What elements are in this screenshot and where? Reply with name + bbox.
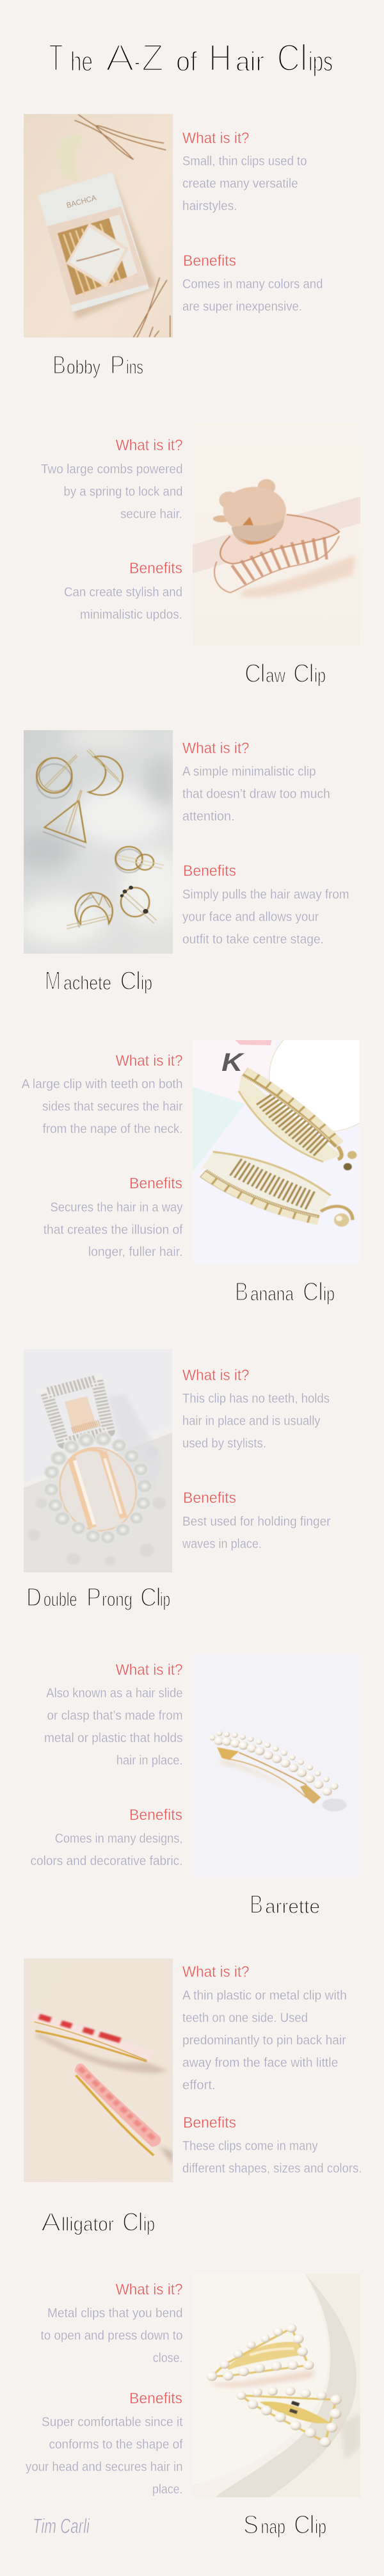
photo: claw clip: [193, 478, 360, 646]
what is it heading: What is it?: [182, 1367, 250, 1384]
what is it text: A thin plastic or metal clip with: [182, 1989, 347, 2003]
label: banana clip: anana: [250, 1283, 294, 1305]
photo: pearl barrette: [209, 1731, 347, 1811]
benefits text: [182, 1515, 331, 1551]
label: claw clip: l: [260, 658, 266, 688]
benefits text: Comes in many designs,: [55, 1832, 183, 1846]
label: bobby pins: B: [52, 350, 66, 380]
label: claw clip: aw: [266, 664, 285, 687]
benefits text: colors and decorative fabric.: [31, 1854, 183, 1868]
panel: snap clip: [26, 2274, 360, 2539]
what is it text: effort.: [182, 2078, 216, 2092]
title: he: [70, 47, 93, 77]
what is it heading: What is it?: [116, 437, 183, 454]
label: machete clip: achete: [63, 972, 111, 994]
photo: pearl snap clips: [206, 2274, 360, 2497]
benefits heading: Benefits: [183, 1490, 236, 1507]
what is it text: predominantly to pin back hair: [182, 2034, 346, 2048]
benefits text: [182, 277, 323, 314]
benefits heading: Benefits: [129, 1807, 182, 1824]
what is it text: A simple minimalistic clip: [182, 765, 316, 779]
benefits text: Simply pulls the hair away from: [182, 888, 349, 902]
label: machete clip: l: [136, 966, 141, 995]
label: double prong clip: C: [140, 1583, 157, 1612]
title: of: [176, 47, 198, 77]
benefits text: [64, 585, 182, 622]
benefits text: Comes in many colors and: [182, 277, 323, 291]
photo: alligator clips: [24, 1959, 173, 2182]
label: snap clip: C: [294, 2510, 310, 2539]
benefits text: These clips come in many: [182, 2139, 318, 2153]
what is it text: [182, 1989, 347, 2092]
label: double prong clip: P: [86, 1583, 101, 1612]
benefits text: [31, 1832, 183, 1868]
label: claw clip: C: [293, 658, 310, 688]
panel: claw clip: [41, 423, 360, 688]
label: claw clip: C: [244, 658, 261, 688]
benefits text: place.: [152, 2482, 183, 2497]
what is it text: Two large combs powered: [41, 462, 183, 477]
panel: machete clip: [15, 724, 349, 995]
what is it text: Small, thin clips used to: [182, 154, 307, 168]
what is it text: teeth on one side. Used: [182, 2011, 308, 2025]
title: l: [300, 37, 308, 79]
label: bobby pins: ins: [126, 356, 143, 379]
benefits text: Best used for holding finger: [182, 1515, 331, 1529]
title: Z: [141, 37, 164, 79]
panel: banana clip: [22, 1021, 384, 1307]
label: banana clip: ip: [323, 1283, 335, 1305]
label: alligator clip: A: [41, 2207, 61, 2237]
what is it text: attention.: [182, 810, 234, 824]
benefits text: that creates the illusion of: [44, 1223, 183, 1237]
what is it text: [41, 2306, 183, 2365]
title: T: [49, 37, 63, 79]
what is it text: A large clip with teeth on both: [22, 1077, 183, 1091]
label: claw clip: ip: [314, 664, 326, 687]
label: alligator clip: lligator: [61, 2213, 114, 2235]
benefits heading: Benefits: [183, 863, 236, 880]
what is it heading: What is it?: [116, 1052, 183, 1070]
title: air: [236, 47, 264, 77]
what is it text: create many versatile: [182, 177, 298, 191]
photo: banana clips: K: [221, 1048, 244, 1077]
what is it heading: What is it?: [116, 2281, 183, 2299]
what is it text: or clasp that’s made from: [47, 1709, 183, 1723]
what is it text: used by stylists.: [182, 1437, 266, 1451]
label: alligator clip: ip: [143, 2213, 155, 2235]
title: -: [134, 47, 140, 77]
label: double prong clip: rong: [102, 1588, 132, 1611]
what is it text: [182, 765, 330, 824]
what is it text: to open and press down to: [41, 2329, 183, 2343]
what is it heading: What is it?: [182, 1964, 250, 1981]
label: alligator clip: C: [122, 2207, 139, 2237]
benefits text: [182, 2139, 362, 2176]
label: alligator clip: l: [138, 2207, 143, 2237]
what is it heading: What is it?: [116, 1661, 183, 1679]
benefits text: [44, 1201, 183, 1259]
label: double prong clip: ouble: [44, 1588, 77, 1611]
label: snap clip: ip: [315, 2516, 326, 2538]
label: bobby pins: obby: [67, 356, 100, 379]
panel: bobby pins: [24, 114, 323, 380]
what is it heading: What is it?: [182, 740, 250, 757]
what is it text: that doesn’t draw too much: [182, 787, 330, 801]
label: banana clip: l: [317, 1277, 324, 1307]
photo: bobby pins in box: BACHCA: [65, 193, 97, 210]
label: machete clip: ip: [141, 972, 152, 994]
benefits text: [182, 888, 349, 947]
benefits text: outfit to take centre stage.: [182, 933, 324, 947]
benefits heading: Benefits: [129, 1175, 182, 1193]
benefits heading: Benefits: [129, 560, 182, 577]
benefits heading: Benefits: [183, 252, 236, 270]
panel: barrette: [31, 1654, 360, 1919]
what is it text: [41, 462, 183, 521]
what is it text: hair in place.: [116, 1754, 183, 1768]
title: H: [209, 37, 232, 79]
benefits text: are super inexpensive.: [182, 300, 302, 314]
what is it text: [182, 154, 307, 213]
what is it text: hair in place and is usually: [182, 1414, 320, 1428]
what is it text: metal or plastic that holds: [44, 1731, 183, 1745]
what is it text: close.: [153, 2351, 183, 2365]
photo: double prong clip: [24, 1349, 172, 1572]
label: machete clip: M: [45, 966, 61, 995]
benefits heading: Benefits: [129, 2390, 182, 2408]
label: bobby pins: P: [110, 350, 125, 380]
panel: double prong clip: [24, 1349, 331, 1612]
label: machete clip: C: [120, 966, 137, 995]
what is it text: sides that secures the hair: [42, 1100, 183, 1114]
benefits text: minimalistic updos.: [80, 608, 182, 622]
benefits text: your face and allows your: [182, 910, 319, 924]
signature: Tim Carli: [33, 2515, 90, 2538]
what is it text: [182, 1392, 330, 1451]
photo: banana clips: [193, 1040, 360, 1264]
label: barrette: B: [250, 1889, 263, 1919]
label: double prong clip: ip: [160, 1588, 170, 1611]
title: A: [105, 37, 135, 79]
what is it text: secure hair.: [120, 507, 182, 521]
benefits text: your head and secures hair in: [26, 2460, 183, 2474]
what is it text: [44, 1686, 183, 1768]
label: double prong clip: D: [26, 1583, 42, 1612]
photo: bobby pins in box: [24, 114, 173, 338]
label: banana clip: C: [303, 1277, 319, 1307]
title: ips: [308, 47, 333, 77]
benefits text: Super comfortable since it: [42, 2415, 183, 2429]
benefits text: different shapes, sizes and colors.: [182, 2162, 362, 2176]
what is it text: Metal clips that you bend: [47, 2306, 183, 2320]
what is it text: away from the face with little: [182, 2056, 338, 2070]
benefits text: longer, fuller hair.: [88, 1245, 183, 1259]
what is it text: This clip has no teeth, holds: [182, 1392, 330, 1406]
benefits heading: Benefits: [183, 2114, 236, 2132]
what is it text: hairstyles.: [182, 199, 237, 213]
what is it heading: What is it?: [182, 129, 250, 147]
what is it text: from the nape of the neck.: [43, 1122, 183, 1136]
label: claw clip: l: [308, 658, 314, 688]
photo: machete clips: [24, 730, 173, 954]
benefits text: conforms to the shape of: [49, 2438, 183, 2452]
benefits text: Can create stylish and: [64, 585, 182, 599]
title: C: [276, 37, 300, 79]
what is it text: Also known as a hair slide: [46, 1686, 183, 1700]
label: snap clip: l: [309, 2510, 315, 2539]
benefits text: [26, 2415, 183, 2497]
label: snap clip: S: [243, 2510, 259, 2539]
what is it text: [22, 1077, 183, 1136]
label: barrette: arrette: [265, 1895, 320, 1918]
benefits text: Secures the hair in a way: [50, 1201, 183, 1215]
what is it text: by a spring to lock and: [64, 485, 183, 499]
benefits text: waves in place.: [182, 1537, 262, 1551]
label: double prong clip: l: [156, 1583, 161, 1612]
label: snap clip: nap: [261, 2516, 285, 2538]
label: banana clip: B: [235, 1277, 248, 1307]
panel: alligator clip: [24, 1959, 362, 2237]
